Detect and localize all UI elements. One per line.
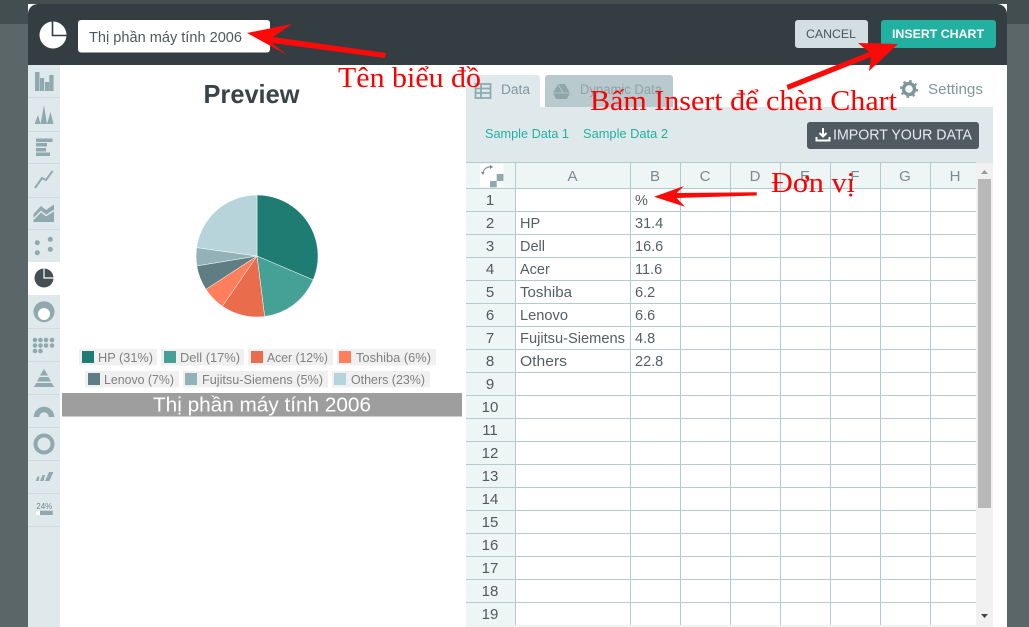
row numbers: 11 (482, 422, 498, 439)
legend item: Lenovo: Lenovo (7%) (104, 373, 174, 387)
share values: 16.6 (635, 239, 663, 255)
company names: Others (520, 354, 567, 370)
icon: line chart (35, 171, 52, 188)
icon: donut filled (34, 301, 54, 322)
row numbers: 1 (486, 192, 494, 209)
annotation: chart name (247, 24, 481, 94)
share values: 6.2 (635, 285, 655, 301)
legend item: Fujitsu-Siemens: Fujitsu-Siemens (5%) (202, 373, 323, 387)
cancel button (795, 20, 868, 48)
company names: Dell (520, 239, 545, 255)
icon: area chart (34, 204, 54, 222)
row numbers: 15 (482, 514, 498, 531)
row numbers: 4 (486, 261, 494, 278)
annotation: insert chart (590, 43, 898, 117)
legend (79, 349, 436, 388)
row numbers: 9 (486, 376, 494, 393)
company names: Toshiba (520, 285, 573, 301)
scrollbar (976, 163, 993, 625)
data tabs (466, 75, 983, 107)
row numbers: 16 (482, 537, 498, 554)
chart title input: Thị phần máy tính 2006 (89, 29, 242, 46)
slice: Fujitsu-Siemens 4.8 (196, 248, 257, 266)
column headers: A (567, 168, 578, 185)
import button (807, 122, 979, 149)
chart caption bar: Thị phần máy tính 2006 (153, 394, 371, 416)
insert chart button: INSERT CHART (892, 27, 985, 41)
sample data links (485, 126, 668, 141)
row numbers: 12 (482, 445, 498, 462)
column headers: F (850, 168, 860, 185)
share values: 4.8 (635, 331, 655, 347)
legend item: Acer: Acer (12%) (267, 351, 328, 365)
preview panel (62, 79, 462, 416)
column headers: B (650, 168, 660, 185)
arrow to insert button (786, 43, 898, 90)
icon: column chart (35, 72, 54, 91)
row numbers (482, 192, 498, 623)
icon: sheet corner (480, 164, 504, 187)
sample data links: Sample Data 1 (485, 126, 569, 141)
legend item: Others (332, 371, 430, 388)
legend item: Dell (161, 349, 244, 366)
spreadsheet (466, 162, 993, 627)
annotation: chart name: Tên biểu đồ (338, 62, 481, 94)
share values: % (635, 193, 648, 209)
row numbers: 8 (486, 353, 494, 370)
share values: 22.8 (635, 354, 663, 370)
legend item: Lenovo (85, 371, 179, 388)
cancel button: CANCEL (806, 27, 856, 41)
preview heading: Preview (204, 79, 300, 109)
icon: pie chart logo (40, 21, 67, 48)
column headers: E (800, 168, 810, 185)
legend item: HP: HP (31%) (98, 351, 153, 365)
row numbers: 18 (482, 583, 498, 600)
annotation: unit: Đơn vị (771, 167, 855, 199)
data toolbar (466, 107, 993, 163)
row numbers: 19 (482, 606, 498, 623)
legend item: Toshiba: Toshiba (6%) (356, 351, 431, 365)
annotation: unit (654, 167, 855, 207)
row numbers: 10 (482, 399, 498, 416)
company names (520, 216, 625, 370)
tab: Dynamic Data: Dynamic Data (580, 82, 662, 97)
share values (635, 193, 663, 370)
slice: HP 31.4 (257, 195, 318, 280)
tab: Dynamic Data (545, 75, 673, 107)
icon: scatter chart (35, 237, 53, 255)
slice: Acer 11.6 (222, 256, 265, 317)
company names: Acer (520, 262, 550, 278)
company names: Lenovo (520, 308, 568, 324)
icon: spike chart (34, 105, 54, 124)
icon: pie chart active (34, 268, 54, 288)
chart type sidebar (28, 65, 60, 627)
header bar (28, 4, 1007, 65)
sample data links: Sample Data 2 (583, 126, 668, 141)
icon: ring (36, 436, 52, 452)
column headers: C (700, 168, 711, 185)
icon: percent progress: 24% (36, 502, 52, 511)
tab: Data: Data (501, 82, 530, 97)
column headers (567, 168, 960, 185)
arrow to percent cell (654, 186, 757, 207)
chart title input (78, 20, 270, 52)
annotation: insert chart: Bấm Insert để chèn Chart (590, 85, 897, 117)
legend item: HP (79, 349, 157, 366)
import button: IMPORT YOUR DATA (833, 128, 972, 144)
row numbers: 13 (482, 468, 498, 485)
icon: percent progress (36, 502, 53, 515)
tab: Data (466, 75, 540, 107)
arrow to title input (247, 24, 386, 58)
legend item: Others: Others (23%) (351, 373, 425, 387)
row numbers: 6 (486, 307, 494, 324)
row numbers: 5 (486, 284, 494, 301)
share values: 11.6 (635, 262, 662, 278)
icon: mini columns (36, 472, 53, 481)
slice: Lenovo 6.6 (197, 256, 257, 289)
column headers: D (750, 168, 761, 185)
row numbers: 14 (482, 491, 498, 508)
row numbers: 17 (482, 560, 498, 577)
slice: Others 22.8 (197, 195, 257, 256)
slice: Dell 16.6 (257, 256, 313, 317)
insert chart button (881, 20, 996, 48)
legend item: Toshiba (337, 349, 436, 366)
row numbers: 7 (486, 330, 494, 347)
company names: HP (520, 216, 540, 232)
column headers: H (950, 168, 960, 185)
share values: 31.4 (635, 216, 663, 232)
legend item: Fujitsu-Siemens (183, 371, 328, 388)
icon: bar chart (36, 138, 52, 156)
share values: 6.6 (635, 308, 655, 324)
icon: dot grid (33, 338, 54, 353)
column headers: G (899, 168, 911, 185)
legend item: Dell: Dell (17%) (180, 351, 240, 365)
legend item: Acer (248, 349, 333, 366)
pie chart (196, 195, 318, 317)
settings tab: Settings (928, 82, 983, 98)
icon: pyramid (34, 369, 54, 387)
company names: Fujitsu-Siemens (520, 331, 625, 347)
row numbers: 3 (486, 238, 494, 255)
slice: Toshiba 6.2 (206, 256, 257, 306)
icon: gauge (36, 410, 52, 417)
row numbers: 2 (486, 215, 494, 232)
chart caption bar (62, 393, 462, 416)
settings tab (901, 81, 983, 98)
